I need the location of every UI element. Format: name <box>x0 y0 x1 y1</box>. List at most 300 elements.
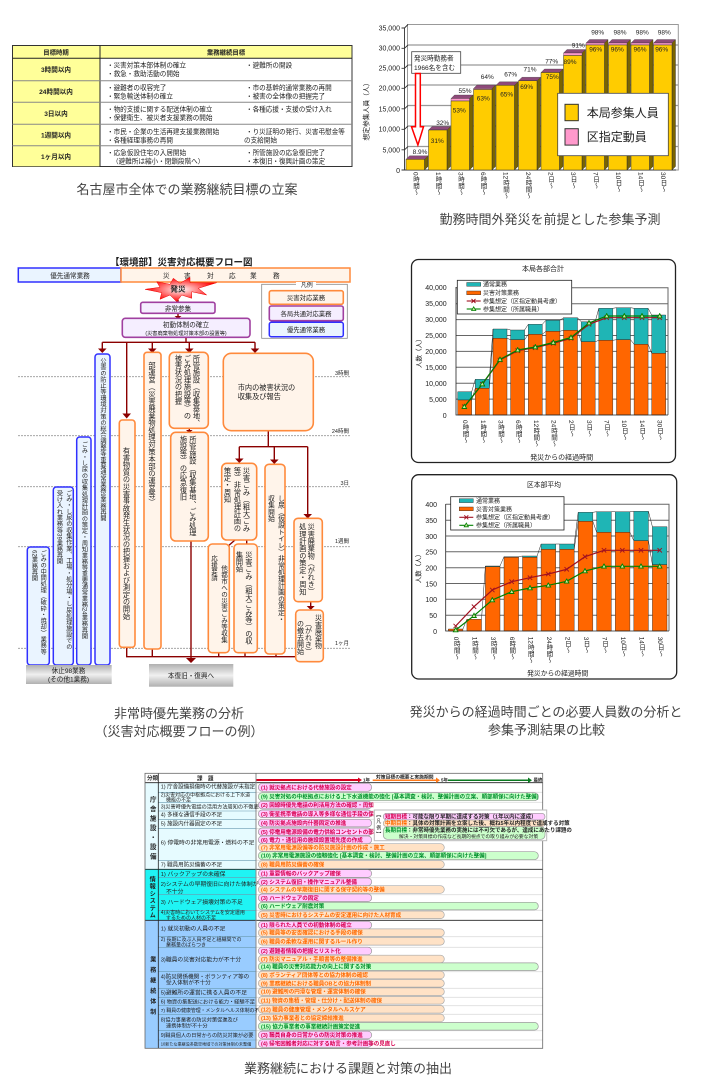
table goal text: ・被害の全体像の把握完了 <box>246 92 325 100</box>
issue list: 機能の不足 <box>166 796 191 804</box>
countermeasure pills: (3) 衛星携帯電話の導入等多様な通信手段の保持 <box>261 810 380 818</box>
box: initial response: (災害廃棄物処理対策本部の設置等) <box>145 329 227 337</box>
y axis labels: 10,000 <box>379 126 400 134</box>
category labels: 情報システム <box>148 875 155 919</box>
percent labels above bars: 8.9% <box>413 149 428 156</box>
x axis labels: 3日〜 <box>569 172 576 189</box>
table header: 分類 <box>147 774 159 782</box>
y axis <box>425 285 447 420</box>
y axis: 200 <box>425 566 437 572</box>
header: disaster response work: 害 <box>184 271 191 280</box>
box: debris removal: 災害廃棄物 <box>314 614 322 650</box>
y axis <box>425 502 437 636</box>
legend <box>262 281 347 338</box>
percent labels above bars <box>413 30 671 156</box>
table header: 目標時期 <box>43 48 69 56</box>
table goal text: ・市民・企業の生活再建支援業務開始 <box>107 127 219 136</box>
box: waste collection planning: ごみ・し尿の収集処理計画の策定・周知業務等重要通常業務24業務再開 <box>80 441 88 640</box>
box: city damage reporting: 収集及び報告 <box>238 392 281 401</box>
table goal text: （避難所は縮小・閉鎖段階へ） <box>112 156 204 166</box>
percent labels above bars: 64% <box>481 74 494 81</box>
x axis labels: 10日〜 <box>620 420 627 440</box>
countermeasure pills: (10) 非常用電源施設の強靱強化 [基本調査・検討、整備計画の立案、順部順保に向けた整備] <box>261 852 487 860</box>
percent labels above bars: 98% <box>591 30 604 36</box>
box: human waste <box>265 464 285 654</box>
x axis labels: 24時間〜 <box>545 637 553 664</box>
table header: 対策目標の概要と実施期間 <box>376 774 434 780</box>
y axis: 35,000 <box>425 301 447 308</box>
x axis labels <box>452 637 663 664</box>
header: disaster response work <box>121 268 350 282</box>
percent labels inside bars: 75% <box>546 74 559 81</box>
box: bulky waste plan: 策定・周知 <box>224 466 232 504</box>
percent labels inside bars: 69% <box>520 84 533 91</box>
box: hazardous materials <box>119 420 135 647</box>
y axis title: 想定参集人員（人） <box>362 79 370 141</box>
x axis labels <box>412 172 666 199</box>
countermeasure pills: (6) 職員の柔軟な運用に関するルール作り <box>261 937 363 945</box>
connector arrows <box>98 300 315 663</box>
y axis labels: 30,000 <box>379 46 400 52</box>
table goal text: ・物的支援に関する配送体制の確立 <box>107 104 213 114</box>
countermeasure pills: (12) 職員の健康管理・メンタルヘルスケア <box>261 1005 366 1013</box>
bar sides <box>424 40 676 170</box>
axis line <box>456 287 668 415</box>
countermeasure pills: (13) 協力事業者との協定締結推進 <box>261 1014 344 1022</box>
issue list: 3)職員の災害対応能力が不十分 <box>161 955 241 963</box>
countermeasure pills: (7) 非常用電源設備等の防災施設計画の作成・施工 <box>261 844 385 852</box>
issue list: 業務量のばらつき <box>166 941 206 948</box>
issue list: 6) 物資の集配送における能力・経験不足 <box>161 998 255 1006</box>
percent labels above bars: 71% <box>523 66 537 74</box>
box: city damage reporting <box>223 353 313 431</box>
percent labels above bars: 55% <box>458 88 472 95</box>
legend: 災害対応業務 <box>287 293 326 302</box>
box: bulky waste plan: 等）非常処理計画の <box>234 466 242 532</box>
bar tops <box>406 40 676 159</box>
arrow: red outlined <box>412 74 424 145</box>
chart frame <box>412 260 676 462</box>
chart: bureau total <box>412 260 676 462</box>
x axis labels: 3時間〜 <box>496 420 505 443</box>
flow chart: disaster response overview <box>18 256 350 687</box>
legend: 災害対策業務 <box>483 289 519 297</box>
countermeasure pills: (2) 避難者情報の把握とリスト化 <box>261 947 341 955</box>
chart: ward HQ average <box>412 475 677 679</box>
table goal text: の支給開始 <box>244 136 277 144</box>
countermeasure pills <box>258 783 539 1048</box>
box: facility restoration: 所管施設（収集基地、ごみ処理 <box>189 436 198 537</box>
y axis labels: 5,000 <box>382 148 400 154</box>
box: bulky waste plan <box>222 463 257 540</box>
green line: own staff <box>464 316 660 407</box>
box: suspended work: (その他1業務) <box>48 674 89 684</box>
time grid lines: 3日 <box>340 480 349 487</box>
x axis labels: 2日〜 <box>567 420 574 437</box>
header: normal priority work: 優先通常業務 <box>50 271 90 280</box>
table row labels: 1週間以内 <box>41 130 71 140</box>
issue list: 7) 職員の健康管理・メンタルヘルス体制の不足 <box>161 1007 264 1014</box>
x axis labels: 2日〜 <box>546 172 554 189</box>
countermeasure pills: (3) 職員自身の日常からの防災対策の推進 <box>261 1031 363 1039</box>
x axis labels: 12時間〜 <box>532 420 540 447</box>
y axis labels: 15,000 <box>379 106 400 114</box>
x axis labels: 14日〜 <box>638 420 645 440</box>
header: disaster response work: 対 <box>207 271 214 280</box>
series connector lines <box>472 308 652 400</box>
countermeasure pills: (11) 物資の集積・管理・仕分け・配送体制の確保 <box>261 996 383 1004</box>
axis title: 発災からの経過時間 <box>530 452 593 462</box>
x axis labels: 3日〜 <box>582 637 589 654</box>
series connector lines <box>463 511 652 629</box>
x axis labels: 6時間〜 <box>479 172 487 195</box>
chart grid <box>402 24 678 170</box>
x axis labels: 7日〜 <box>602 420 610 437</box>
table goal text: ・各種応援・支援の受け入れ <box>246 104 332 114</box>
callout: staff on duty: 1966名を含む <box>414 63 455 72</box>
issue list: 1) 就災初動の人員の不足 <box>161 924 226 932</box>
x axis labels: 7日〜 <box>592 172 599 189</box>
countermeasure pills: (10) 避難所の円滑な管理・運営体制の確保 <box>261 988 366 996</box>
legend <box>558 93 668 156</box>
y axis labels: 35,000 <box>379 26 400 32</box>
table goal text: ・災害対策本部体制の確立 <box>107 60 187 70</box>
time grid lines: 1ヶ月 <box>335 640 349 647</box>
countermeasure pills: (14) 職員の災害対応能力の向上に関する対策 <box>261 963 372 971</box>
issue list: 連携体制が不十分 <box>166 1022 208 1030</box>
box: bulky collection: 集開始 <box>236 550 244 574</box>
countermeasure pills: (1) 限られた人員での初動体制の確立 <box>261 921 352 929</box>
x axis labels: 24時間〜 <box>550 420 558 447</box>
box: aid request <box>208 544 229 653</box>
caption: required staffing comparison <box>410 704 682 738</box>
box: bulky collection <box>234 544 257 653</box>
legend: 参集想定（区指定動員考慮） <box>476 514 554 522</box>
box: suspended work <box>26 665 112 684</box>
y axis title: 人数（人） <box>414 335 423 368</box>
x axis labels: 2日〜 <box>563 637 571 654</box>
y axis labels <box>379 26 400 175</box>
legend box: 中期目標：具体の対策計画を立案した後、概ね5年以内程度で達成する対策 <box>385 819 570 827</box>
issue list: 2) 長期に及ぶ人員不足と組織間での <box>161 936 242 943</box>
countermeasure pills: (2) 回線時優先電話の利活用方法の確認・周知 <box>261 801 374 809</box>
percent labels inside bars: 96% <box>611 46 624 54</box>
x axis labels: 30日〜 <box>656 637 663 657</box>
legend box: 解決・対策目標の作成など長期的視点での取り組みが必要な対策 <box>399 833 538 840</box>
red line: designated <box>464 318 660 407</box>
percent labels above bars: 91% <box>572 42 585 50</box>
bars: yellow bureau staff <box>406 45 672 170</box>
x axis labels: 7日〜 <box>600 637 608 654</box>
x axis labels: 0時間〜 <box>452 637 460 660</box>
x axis labels: 14日〜 <box>638 637 645 657</box>
countermeasure pills: (4) 帰宅困難者対応に対する助言・参考計画等の見直し <box>261 1040 396 1048</box>
percent labels inside bars: 53% <box>453 108 466 114</box>
box: aid request: 応援要請 <box>210 555 218 582</box>
y axis: 15,000 <box>425 365 447 372</box>
table goal text: ・本復旧・復興計画の策定 <box>246 156 326 166</box>
countermeasure pills: (15) 協力事業者の事業継続計画策定促進 <box>261 1022 361 1030</box>
legend: 災害対策業務 <box>476 505 512 513</box>
percent labels above bars: 98% <box>636 30 649 36</box>
table row labels <box>39 65 73 161</box>
caption: flow chart: （災害対応概要フローの例） <box>94 724 264 739</box>
gridlines <box>456 288 668 415</box>
axis title: 発災からの経過時間 <box>527 668 588 678</box>
table header <box>43 48 246 56</box>
issue list: 10新たな業継没多数空地域での対策体制の未整備 <box>161 1040 251 1046</box>
legend <box>457 280 572 314</box>
countermeasure pills: (5) 災害時におけるシステムの安定運用に向けた人材育成 <box>261 911 402 919</box>
time grid lines: 3時間 <box>335 369 349 377</box>
percent labels above bars: 32% <box>436 120 449 127</box>
chart frame <box>412 475 677 679</box>
time grid lines: 1週間 <box>335 537 349 545</box>
table goal text <box>107 60 345 166</box>
x axis labels: 3時間〜 <box>456 172 465 195</box>
legend: 参集想定（区指定動員考慮） <box>483 297 561 305</box>
table goal text: ・応急仮設住宅の入居開始 <box>107 148 187 157</box>
box: HQ operations: 部運営（災害廃棄物処理対策本部の運営等） <box>148 362 157 506</box>
header: normal priority work <box>18 268 121 282</box>
table goal text: ・所管施設の応急復旧完了 <box>246 148 325 157</box>
box: debris removal <box>296 610 323 662</box>
percent labels above bars: 98% <box>658 30 671 36</box>
table header: 5年 <box>441 776 449 784</box>
box: pollution prevention: 公害の防止等環境対策の総合調整等重要通常業務9業務再開 <box>99 358 106 523</box>
issue list: 3)災害時優先電話の活用方法周知の不徹底 <box>161 803 259 811</box>
issue list: 8)協力事業者の防災対策促進及び <box>161 1016 239 1024</box>
box: collection work <box>53 487 73 665</box>
x axis labels: 10日〜 <box>614 172 621 192</box>
x axis labels: 12時間〜 <box>526 637 535 664</box>
legend: 凡例 <box>301 281 313 289</box>
countermeasure pills: (2) システム復旧・操作マニュアル整備 <box>261 878 357 886</box>
box: facility restoration: 施設等）の応急復旧 <box>180 435 188 502</box>
box: bulky collection: 災害ごみ（粗大ごみ等）の収 <box>245 551 254 646</box>
category labels: 業務継続体制 <box>149 955 156 1019</box>
countermeasure pills: (4) 防災拠点施設内什器固定の推進 <box>261 819 347 827</box>
percent labels inside bars: 31% <box>431 138 444 145</box>
table goal text: ・救急・救助活動の開始 <box>107 69 180 78</box>
x axis labels: 0時間〜 <box>461 420 469 443</box>
panel: business continuity targets table <box>12 46 352 166</box>
teal bars: normal work <box>458 308 666 400</box>
y axis: 40,000 <box>425 285 447 292</box>
box: facility damage survey: 被害状況の把握 <box>174 354 184 406</box>
box: initial response: 初動体制の確立 <box>163 320 209 329</box>
issue list: 2)災害対応の中枢拠点における上下水道 <box>161 791 250 798</box>
bars: pink designated staff <box>451 43 672 101</box>
legend: 参集想定（所属職員） <box>483 305 543 313</box>
box: debris plan: 処理計画の策定・周知 <box>299 523 308 596</box>
x axis labels: 24時間〜 <box>524 172 532 199</box>
issue list: 5) 施設内什器固定の不足 <box>161 820 223 828</box>
chart title: 区本部平均 <box>527 480 561 489</box>
countermeasure pills: (3) ハードウェアの固定 <box>261 895 319 902</box>
table header: 課 題 <box>197 775 214 782</box>
percent labels inside bars: 96% <box>633 46 647 54</box>
x axis labels: 1時間〜 <box>434 172 442 195</box>
countermeasure pills: (8) 職員用防災備蓄の確保 <box>261 860 325 868</box>
caption: flow chart <box>94 706 264 739</box>
box: emergency assembly: 非常参集 <box>165 304 192 313</box>
table goal text: ・避難者の収容完了 <box>107 83 166 92</box>
issue list: 受入体制が不十分 <box>166 979 211 987</box>
countermeasure pills: (4) システムの早期復旧に関する保守契約等の整備 <box>261 886 385 894</box>
countermeasure pills: (6) ハードウェア耐震対策 <box>261 902 325 910</box>
countermeasure pills: (8) ボランティア団体等との協力体制の確認 <box>261 971 368 979</box>
table row labels: 3時間以内 <box>41 65 71 74</box>
issue list <box>161 783 264 1046</box>
caption: attendance chart: 勤務時間外発災を前提とした参集予測 <box>439 212 661 227</box>
panel: issues and countermeasures table <box>145 773 572 1048</box>
y axis labels: 20,000 <box>379 86 400 92</box>
header: disaster response work: 災 <box>163 272 170 280</box>
x axis labels: 3日〜 <box>585 420 592 437</box>
percent labels above bars: 98% <box>613 30 627 36</box>
table goal text: ・緊急輸送体制の確立 <box>107 92 173 100</box>
y axis: 30,000 <box>425 317 447 324</box>
legend: 通常業務 <box>476 497 500 505</box>
issue list: 4)災害時においてシステムを安定運用 <box>161 909 245 916</box>
legend box: 短期目標：可能な限り早期に達成する対策（1年以内に達成） <box>385 812 537 820</box>
countermeasure pills: (6) 電力・通信用の施設設置場先度の作成 <box>261 836 363 844</box>
y axis: 0 <box>443 413 447 420</box>
box: initial response <box>122 318 250 337</box>
countermeasure pills: (9) 災害対処の中枢拠点における上下水道機能の強化 [基本調査・検討、整備計画の立案、順部順保に向けた整備] <box>261 793 539 801</box>
box: HQ operations <box>144 352 161 649</box>
legend: 区指定動員 <box>587 129 647 144</box>
box: intermediate processing <box>27 547 49 665</box>
box: debris removal: の撤去開始 <box>296 620 304 656</box>
x axis labels <box>461 420 663 447</box>
issue list: 5)避難所の運営に携る人員の不足 <box>161 989 247 997</box>
y axis: 50 <box>429 613 437 620</box>
box: debris plan: 災害廃棄物（がれき） <box>307 523 316 595</box>
box: facility damage survey: 所管施設（収集基地、 <box>192 354 202 426</box>
caption: required staffing comparison: 参集予測結果の比較 <box>488 722 605 738</box>
legend: 参集想定（所属職員） <box>476 522 536 530</box>
box: to recovery: 本復旧・復興へ <box>168 671 214 680</box>
table header: 業務継続目標 <box>207 48 246 56</box>
legend box: 【凡例】 <box>375 812 381 838</box>
header: disaster response work: 務 <box>273 271 280 280</box>
header: disaster response work: 応 <box>229 272 236 280</box>
box: city damage reporting: 市内の被害状況の <box>238 383 295 392</box>
box: human waste: 収集開始 <box>266 495 275 523</box>
chart: staff attendance prediction <box>362 24 678 199</box>
caption: flow chart: 非常時優先業務の分析 <box>114 706 244 721</box>
x axis labels: 10日〜 <box>619 637 626 657</box>
x axis labels: 0時間〜 <box>412 172 420 195</box>
flow title: 【環境部】災害対応概要フロー図 <box>110 256 253 268</box>
legend <box>451 497 564 530</box>
caption: issues and countermeasures: 業務継続における課題と対策の抽出 <box>244 1061 452 1076</box>
y axis: 300 <box>425 534 437 541</box>
box: facility damage survey <box>169 352 208 428</box>
box: suspended work: 休止98業務 <box>52 666 86 675</box>
issue list: 2)システムの早期復旧に向けた体制が <box>161 880 259 888</box>
issue list: 不十分 <box>166 887 184 895</box>
table goal text: ・市の基幹的通常業務の再開 <box>246 83 332 92</box>
orange bars: disaster work <box>448 521 667 631</box>
percent labels inside bars: 65% <box>500 92 513 98</box>
percent labels inside bars: 63% <box>477 96 490 102</box>
teal bars: normal work <box>485 511 667 567</box>
box: human waste: し尿（仮設トイレ）非常処理計画の策定・ <box>276 495 285 622</box>
x axis labels: 1時間〜 <box>470 637 479 660</box>
y axis labels: 25,000 <box>379 66 400 72</box>
percent labels inside bars: 89% <box>563 59 577 66</box>
legend: 各局共通対応業務 <box>280 309 332 318</box>
countermeasure pills: (5) 停電用電源設備の電力供給コンセントの部分行事析 <box>261 828 396 836</box>
y axis: 400 <box>425 502 437 509</box>
box: collection work: 受け入れ業務等39業務再開 <box>56 489 63 566</box>
percent labels inside bars: 96% <box>655 46 668 54</box>
y axis: 350 <box>425 518 437 525</box>
legend: 優先通常業務 <box>287 325 326 334</box>
y axis: 100 <box>425 597 437 604</box>
issue list: 1) バックアップの未確保 <box>161 870 226 878</box>
percent labels inside bars: 96% <box>589 46 602 54</box>
x axis labels: 3時間〜 <box>489 637 497 660</box>
box: emergency assembly <box>141 302 215 313</box>
y axis: 250 <box>425 550 437 556</box>
issue list: 3) ハードウェア損壊対策の不足 <box>161 898 243 906</box>
issue list: 4) 多様な通信手段の不足 <box>161 810 223 818</box>
issue list: 4)防災関係機関・ボランティア等の <box>161 973 250 981</box>
issue list: 6) 停電時の非常用電源・燃料の不足 <box>161 839 255 847</box>
box: to recovery <box>149 664 233 687</box>
x axis labels: 12時間〜 <box>502 172 510 199</box>
box: bulky waste plan: 災害ごみ（粗大ごみ <box>242 467 252 532</box>
y axis: 150 <box>425 582 437 588</box>
box: collection work: ごみ・し尿の収集作業、工場・処分場・し尿処理施設での <box>65 489 72 650</box>
issue list: するための人材の不足 <box>166 914 216 921</box>
x axis labels: 14日〜 <box>636 172 644 192</box>
table goal text: ・各種経理事務の再開 <box>107 136 173 144</box>
y axis: 0 <box>433 629 437 636</box>
red line: designated <box>456 550 660 626</box>
table header <box>147 774 543 784</box>
legend: 本局参集人員 <box>587 105 659 120</box>
table header: 最終 <box>534 776 543 784</box>
y axis title: 人数（人） <box>414 551 422 583</box>
burst: disaster occurrence <box>145 277 217 302</box>
orange bars: disaster work <box>458 330 666 415</box>
y axis: 5,000 <box>429 397 447 404</box>
table goal text: ・り災証明の発行、災害弔慰金等 <box>246 127 345 136</box>
table row labels: 3日以内 <box>44 109 68 118</box>
y axis: 20,000 <box>425 349 447 356</box>
callout: staff on duty <box>412 52 461 73</box>
callout: staff on duty: 発災時勤務者 <box>414 54 454 62</box>
box: intermediate processing: ごみの中間処理（破砕・焼却）業務等 <box>39 549 46 655</box>
category labels: 庁舎施設・設備 <box>148 796 156 862</box>
x axis labels: 30日〜 <box>659 172 666 192</box>
box: aid request: 他都市への災害ごみ等収集 <box>220 564 228 644</box>
green line: own staff <box>456 566 660 630</box>
time grid lines: 24時間 <box>332 427 349 435</box>
table goal text: ・避難所の開設 <box>246 60 293 70</box>
box: waste collection planning <box>77 437 91 665</box>
countermeasure pills: (5) 職員等の安否確認における手段の確保 <box>261 929 363 937</box>
countermeasure pills: (1) 重要情報のバックアップ確保 <box>261 870 341 878</box>
box: debris plan <box>294 518 322 602</box>
category labels <box>148 796 156 1019</box>
header: disaster response work: 業 <box>250 271 257 280</box>
